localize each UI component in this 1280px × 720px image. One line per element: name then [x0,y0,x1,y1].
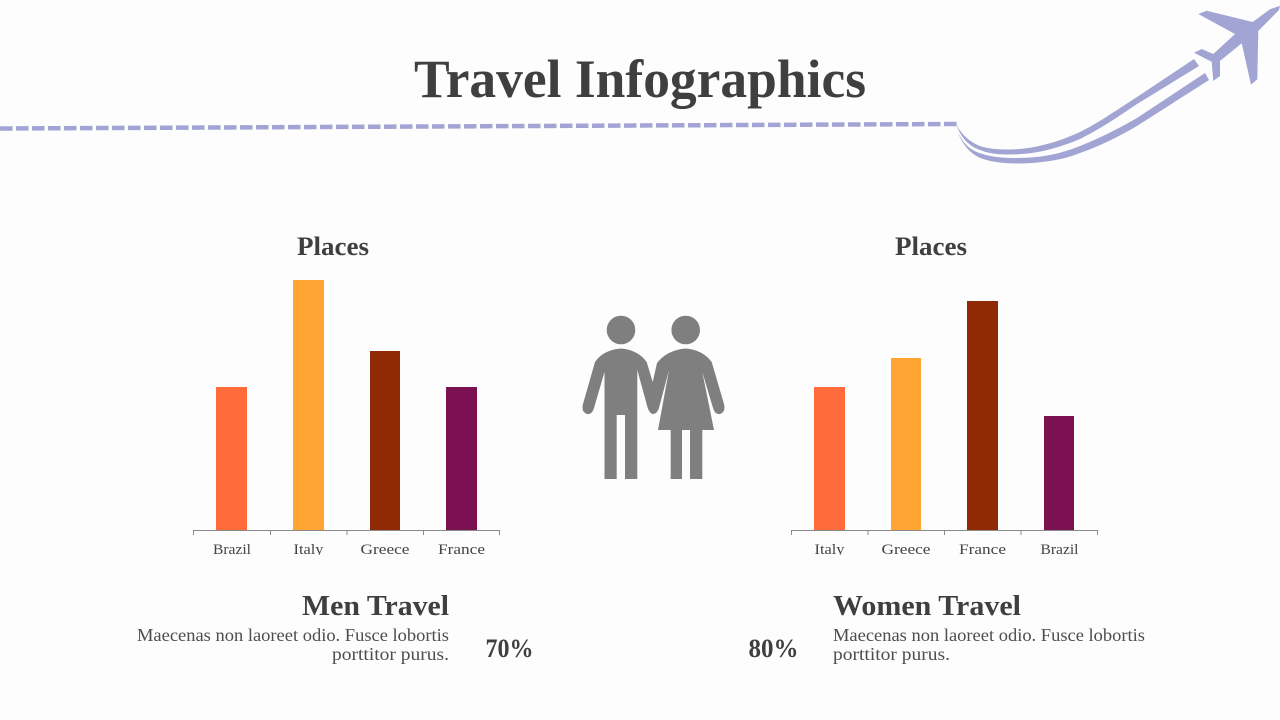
dashed flight path [0,124,957,128]
heading: Men Travel [302,590,449,622]
chart: women places [792,232,1098,558]
description: Maecenas non laoreet odio. Fusce lobortis [833,625,1145,645]
axis labels: Brazil [213,542,251,558]
axis labels: Greece [360,542,410,558]
axis labels: France [959,542,1006,558]
icon: man and woman holding hands [582,316,724,479]
bar: France [967,301,998,530]
axis labels [213,544,484,555]
chart: men places [194,232,500,558]
bar: France [446,387,477,530]
bar: Italy [293,280,324,530]
description: Maecenas non laoreet odio. Fusce lobortis [137,625,449,645]
axis labels: France [438,542,485,558]
axis labels: Brazil [1040,542,1078,558]
bar: Greece [370,351,400,530]
axis labels: Italy [814,542,845,558]
chart heading: Places [297,232,369,261]
bar: Brazil [216,387,247,530]
description [137,625,449,664]
chart heading: Places [895,232,967,261]
axis labels: Greece [882,542,931,558]
stat: women 80%: 80% [748,634,798,663]
description [833,625,1145,664]
bar: Greece [891,358,921,530]
heading: Women Travel [833,590,1021,622]
stat: men 70%: 70% [486,634,534,663]
description: porttitor purus. [833,644,950,664]
description: porttitor purus. [332,644,449,664]
icon: airplane with contrail [956,6,1280,164]
bar: Brazil [1044,416,1074,530]
bar: Italy [814,387,845,530]
axis labels [815,544,1078,555]
text block: men travel [137,590,449,664]
text block: women travel [833,590,1145,664]
axis labels: Italy [294,542,324,558]
title: Travel Infographics [414,49,866,109]
